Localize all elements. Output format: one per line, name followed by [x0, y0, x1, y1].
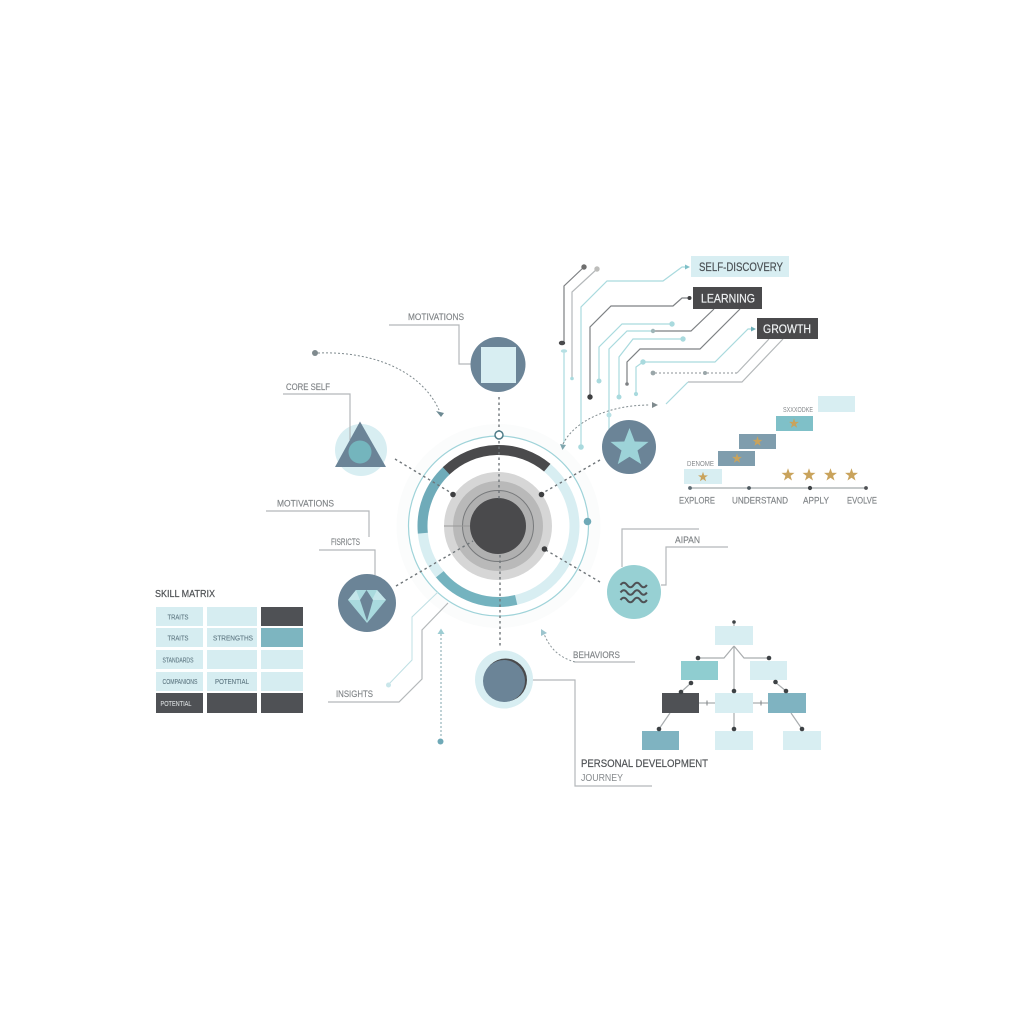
- matrix row 2: [156, 628, 303, 647]
- timeline: EVOLVE: [847, 496, 877, 506]
- matrix row 3: [156, 650, 303, 669]
- skill matrix: SKILL MATRIX: [155, 589, 215, 600]
- node: personal development journey: JOURNEY: [581, 773, 623, 784]
- timeline: [679, 486, 877, 506]
- node: personal development journey: [475, 650, 708, 786]
- node: waves: [607, 529, 728, 619]
- label: behaviors with arrow: BEHAVIORS: [573, 650, 620, 661]
- dotted spokes and hub nodes: [395, 397, 600, 647]
- node: motivations and strengths with diamond: MOTIVATIONS: [277, 498, 334, 510]
- tag: growth: [757, 318, 818, 339]
- matrix row 2: STRENGTHS: [213, 634, 253, 642]
- node: core self: CORE SELF: [286, 382, 330, 393]
- node: motivations top: [389, 312, 526, 392]
- node: motivations and strengths with diamond: FISRICTS: [331, 537, 360, 548]
- timeline: EXPLORE: [679, 496, 715, 506]
- matrix row 4: POTENTIAL: [215, 677, 249, 686]
- label: insights with connectors: INSIGHTS: [336, 689, 373, 700]
- matrix row 1: [156, 607, 303, 626]
- matrix row 4: [156, 672, 303, 691]
- timeline: UNDERSTAND: [732, 496, 788, 506]
- tree diagram: [642, 620, 821, 750]
- matrix row 2: TRAITS: [168, 634, 188, 642]
- matrix row 1: TRAITS: [168, 612, 188, 622]
- matrix row 3: STANDARDS: [162, 656, 194, 664]
- tag: self-discovery: [691, 256, 789, 277]
- tag: growth: GROWTH: [763, 324, 811, 336]
- label: insights with connectors: [328, 592, 448, 702]
- node: core self: [283, 382, 387, 476]
- node: motivations and strengths with diamond: [266, 498, 396, 632]
- node: motivations top: MOTIVATIONS: [408, 312, 464, 323]
- circuit connector lines: [559, 264, 783, 450]
- tag: learning: [693, 287, 762, 309]
- tag: learning: LEARNING: [701, 294, 755, 306]
- matrix row 5: [156, 693, 303, 713]
- stepped progress chart with stars: SXXXODKE: [783, 407, 813, 414]
- stepped progress chart with stars: DENOME: [687, 461, 714, 468]
- tag: self-discovery: SELF-DISCOVERY: [699, 262, 783, 274]
- node: personal development journey: PERSONAL DEVELOPMENT: [581, 758, 708, 770]
- central ring diagram: [391, 419, 606, 633]
- dotted arrow bottom: [438, 628, 444, 744]
- node: waves: AIPAN: [675, 535, 700, 546]
- stepped progress chart with stars: [679, 396, 877, 506]
- matrix row 5: POTENTIAL: [160, 699, 192, 708]
- timeline: APPLY: [803, 496, 830, 506]
- segmented progress ring: [391, 419, 606, 633]
- node: star: [602, 415, 656, 474]
- dotted arrow top left: [312, 350, 444, 417]
- label: behaviors with arrow: [541, 629, 635, 662]
- matrix row 4: COMPANIONS: [162, 677, 198, 686]
- skill matrix: [155, 589, 303, 713]
